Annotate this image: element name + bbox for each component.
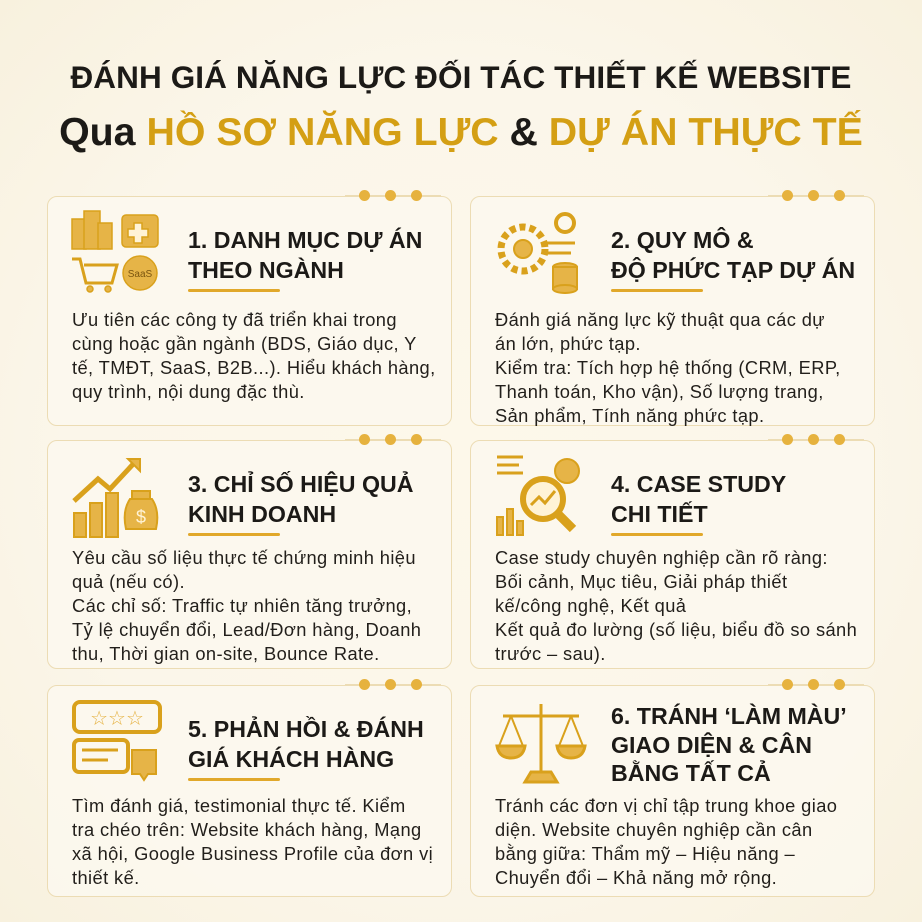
heading: GIAO DIỆN & CÂN <box>611 732 812 758</box>
body text: kế/công nghệ, Kết quả <box>495 595 686 616</box>
body text: Tránh các đơn vị chỉ tập trung khoe giao diện. Website chuyên nghiệp cần cân bằng giữa: Thẩm mỹ – Hiệu năng – Chuyển đổi – Khả năng mở rộng. <box>495 795 837 888</box>
heading: KINH DOANH <box>188 501 336 527</box>
icon: growth chart money bag: $ <box>136 507 146 527</box>
body text: Yêu cầu số liệu thực tế chứng minh hiệu quả (nếu có). <box>72 547 416 592</box>
body text: Kiểm tra: Tích hợp hệ thống (CRM, ERP, Thanh toán, Kho vận), Số lượng trang, Sản phẩm, Tính năng phức tạp. <box>495 357 841 426</box>
heading: GIÁ KHÁCH HÀNG <box>188 746 394 772</box>
icon: growth chart money bag <box>72 458 158 538</box>
heading: BẰNG TẤT CẢ <box>611 760 771 786</box>
title line 2: Qua HỒ SƠ NĂNG LỰC & DỰ ÁN THỰC TẾ <box>59 110 863 154</box>
body text: Kết quả đo lường (số liệu, biểu đồ so sánh <box>495 619 857 640</box>
heading <box>611 471 786 527</box>
panel: 4 case study <box>470 440 875 669</box>
heading: ĐỘ PHỨC TẠP DỰ ÁN <box>611 257 855 283</box>
body text: Ưu tiên các công ty đã triển khai trong cùng hoặc gần ngành (BDS, Giáo dục, Y tế, TMĐT, SaaS, B2B...). Hiểu khách hàng, quy trình, nội dung đặc thù. <box>72 309 436 402</box>
heading <box>611 227 855 283</box>
heading: THEO NGÀNH <box>188 257 344 283</box>
icon: rating chat <box>72 700 162 782</box>
panel: 5 phan hoi <box>47 685 452 897</box>
heading: 2. QUY MÔ & <box>611 227 754 253</box>
icon: gears database <box>498 212 578 294</box>
panel: 3 chi so <box>47 440 452 669</box>
body text: trước – sau). <box>495 643 606 664</box>
panel: 1 danh muc <box>47 196 452 426</box>
heading <box>611 703 847 786</box>
body text: Case study chuyên nghiệp cần rõ ràng: <box>495 547 828 568</box>
body text: Đánh giá năng lực kỹ thuật qua các dự án lớn, phức tạp. <box>495 309 825 354</box>
body text <box>495 309 841 426</box>
panel: 2 quy mo <box>470 196 875 426</box>
body text: Bối cảnh, Mục tiêu, Giải pháp thiết <box>495 571 787 592</box>
icon: buildings cart saas <box>71 210 159 293</box>
body text: Tỷ lệ chuyển đổi, Lead/Đơn hàng, Doanh thu, Thời gian on-site, Bounce Rate. <box>72 619 421 664</box>
heading <box>188 471 413 527</box>
body text: Các chỉ số: Traffic tự nhiên tăng trưởng, <box>72 595 412 616</box>
panel: 6 tranh lam mau <box>470 685 875 897</box>
heading <box>188 716 424 772</box>
body text <box>72 547 421 664</box>
heading: 3. CHỈ SỐ HIỆU QUẢ <box>188 471 413 497</box>
heading: 4. CASE STUDY <box>611 471 786 497</box>
title line 1: ĐÁNH GIÁ NĂNG LỰC ĐỐI TÁC THIẾT KẾ WEBSITE <box>70 59 852 95</box>
heading: CHI TIẾT <box>611 501 708 527</box>
body text <box>495 547 857 664</box>
icon: magnifier report <box>496 456 580 536</box>
heading: 6. TRÁNH ‘LÀM MÀU’ <box>611 703 847 729</box>
body text: tra chéo trên: Website khách hàng, Mạng xã hội, Google Business Profile của đơn vị thiết kế. <box>72 819 433 888</box>
heading: 5. PHẢN HỒI & ĐÁNH <box>188 716 424 742</box>
heading <box>188 227 422 283</box>
icon: buildings cart saas: SaaS <box>128 269 153 280</box>
icon: rating chat: ☆☆☆ <box>90 706 144 730</box>
icon: balance scale <box>495 704 587 784</box>
body text: Tìm đánh giá, testimonial thực tế. Kiểm <box>72 795 406 816</box>
heading: 1. DANH MỤC DỰ ÁN <box>188 227 422 253</box>
